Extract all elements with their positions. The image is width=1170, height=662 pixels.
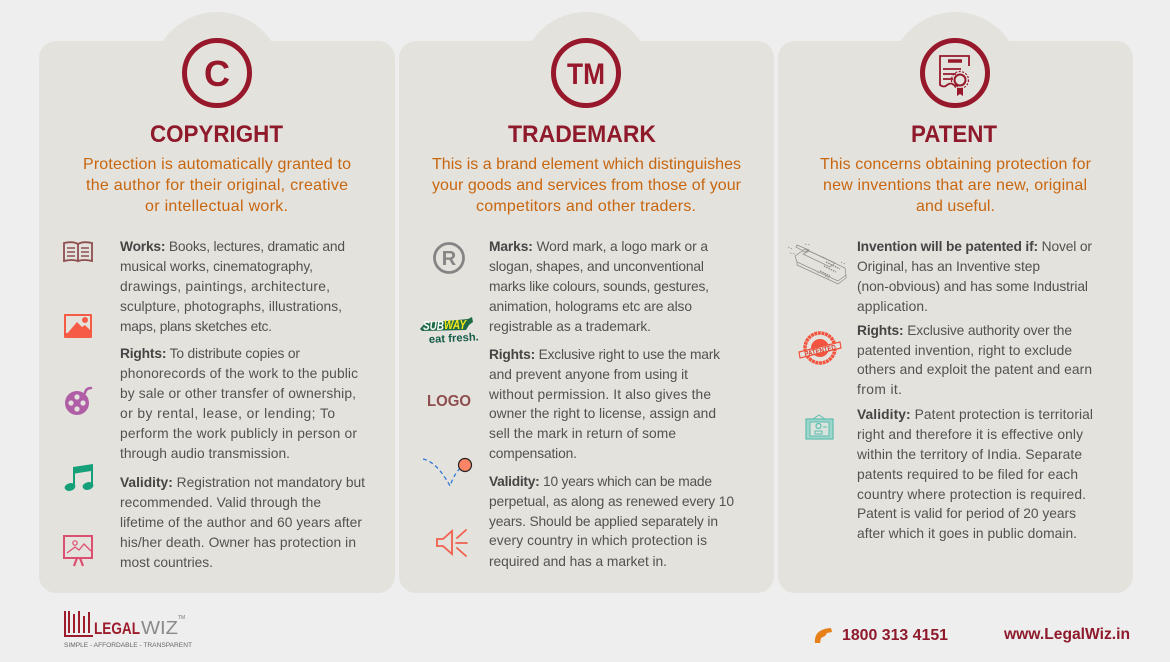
icon: logo word: LOGO <box>427 393 471 410</box>
footer logo: LegalWiz: TM <box>178 615 185 621</box>
text: copyright details: or by rental, lease, or lending; To <box>120 406 335 421</box>
icon: patented stamp <box>799 333 841 363</box>
intro: trademark <box>432 156 742 215</box>
text: patent details: (non-obvious) and has some Industrial <box>857 279 1088 294</box>
text: copyright details: Validity: Registration not mandatory but <box>120 475 365 490</box>
footer logo: LegalWiz: SIMPLE - AFFORDABLE - TRANSPARENT <box>64 642 192 649</box>
text: trademark details: slogan, shapes, and unconventional <box>489 259 704 274</box>
icon: patented stamp: PATENTED <box>804 342 837 358</box>
icon: presentation board <box>63 536 93 566</box>
icon: bouncing ball <box>423 458 472 486</box>
icon: copyright symbol <box>184 40 250 106</box>
text: copyright details: musical works, cinematography, <box>120 259 313 274</box>
icon: registered mark <box>434 244 464 272</box>
text: patent details: patented invention, right to exclude <box>857 343 1072 358</box>
text: copyright details: his/her death. Owner has protection in <box>120 535 356 550</box>
footer logo: LegalWiz: LEGAL <box>94 619 140 638</box>
text: copyright details: most countries. <box>120 555 213 570</box>
panel: patent <box>778 12 1133 593</box>
intro: trademark: your goods and services from those of your <box>432 177 742 194</box>
icon: music note <box>64 464 94 492</box>
footer logo: LegalWiz: WIZ <box>141 618 178 638</box>
text: trademark details: years. Should be applied separately in <box>489 514 718 529</box>
text: trademark details: registrable as a trademark. <box>489 319 651 334</box>
text: trademark details: perpetual, as along as renewed every 10 <box>489 494 734 509</box>
text: copyright details: Rights: To distribute copies or <box>120 346 300 361</box>
text: copyright details: maps, plans sketches etc. <box>120 319 272 334</box>
text: patent details: others and exploit the patent and earn <box>857 362 1092 377</box>
text: patent details: application. <box>857 299 928 314</box>
text: trademark details <box>488 239 734 569</box>
text: copyright details: drawings, paintings, architecture, <box>120 279 330 294</box>
text: copyright details: sculpture, photographs, illustrations, <box>120 299 342 314</box>
text: trademark details: animation, holograms etc are also <box>489 299 692 314</box>
text: patent details: Rights: Exclusive authority over the <box>857 323 1072 338</box>
icon: teal certificate <box>806 415 833 439</box>
intro: patent: This concerns obtaining protection for <box>820 156 1092 173</box>
icon: subway logo: eat fresh. <box>429 331 479 346</box>
icon: TM symbol <box>554 40 618 106</box>
icon: device patent drawing <box>788 244 846 284</box>
intro: patent <box>820 156 1092 215</box>
intro: patent: and useful. <box>916 198 995 215</box>
text: trademark details: required and has a market in. <box>489 554 667 569</box>
text: copyright details: lifetime of the author and 60 years after <box>120 515 362 530</box>
text: patent details: country where protection is required. <box>857 487 1086 502</box>
text: patent details: Original, has an Inventive step <box>857 259 1040 274</box>
footer website: www.LegalWiz.in <box>1003 626 1130 643</box>
intro: trademark: This is a brand element which distinguishes <box>432 156 741 173</box>
text: trademark details: and prevent anyone from using it <box>489 367 688 382</box>
text: copyright details: Works: Books, lectures, dramatic and <box>120 239 345 254</box>
text: trademark details: owner the right to license, assign and <box>489 406 716 421</box>
icon: subway logo: SUB <box>423 319 444 333</box>
text: patent details: after which it goes in public domain. <box>857 526 1077 541</box>
heading: patent: PATENT <box>911 121 997 148</box>
heading: copyright: COPYRIGHT <box>150 121 283 148</box>
icon: subway logo: WAY <box>444 318 467 332</box>
text: patent details: Patent is valid for period of 20 years <box>857 506 1076 521</box>
text: patent details: from it. <box>857 382 902 397</box>
text: copyright details: phonorecords of the work to the public <box>120 366 358 381</box>
heading: trademark: TRADEMARK <box>508 121 657 148</box>
intro: copyright: Protection is automatically granted to <box>83 156 351 173</box>
icon: TM symbol: TM <box>567 58 605 91</box>
icon: registered mark: R <box>442 248 457 270</box>
text: trademark details: marks like colours, sounds, gestures, <box>489 279 709 294</box>
text: copyright details: perform the work publicly in person or <box>120 426 357 441</box>
text: trademark details: Rights: Exclusive right to use the mark <box>489 347 720 362</box>
text: patent details: Validity: Patent protection is territorial <box>857 407 1093 422</box>
text: trademark details: Validity: 10 years which can be made <box>489 474 712 489</box>
intro: patent: new inventions that are new, original <box>823 177 1087 194</box>
text: trademark details: Marks: Word mark, a logo mark or a <box>489 239 708 254</box>
icon: subway logo <box>420 317 479 346</box>
icon: phone <box>815 628 832 643</box>
text: trademark details: sell the mark in return of some <box>489 426 676 441</box>
text: copyright details: recommended. Valid through the <box>120 495 321 510</box>
text: patent details <box>856 239 1093 541</box>
panel: copyright <box>39 12 395 593</box>
text: copyright details <box>120 239 365 570</box>
text: patent details: within the territory of India. Separate <box>856 447 1082 462</box>
intro: trademark: competitors and other traders. <box>476 198 696 215</box>
intro: copyright <box>83 156 351 215</box>
panel: trademark <box>399 12 774 593</box>
icon: book <box>64 242 92 261</box>
text: copyright details: by sale or other transfer of ownership, <box>120 386 356 401</box>
footer logo: LegalWiz <box>64 611 192 649</box>
footer phone number: 1800 313 4151 <box>842 627 948 644</box>
icon: picture <box>64 314 92 338</box>
text: trademark details: without permission. It also gives the <box>488 387 711 402</box>
intro: copyright: the author for their original, creative <box>86 177 348 194</box>
icon: megaphone <box>437 530 467 556</box>
text: patent details: Invention will be patented if: Novel or <box>857 239 1092 254</box>
text: copyright details: through audio transmission. <box>120 446 290 461</box>
text: patent details: patents required to be filed for each <box>857 467 1078 482</box>
icon: film reel <box>65 388 91 415</box>
text: trademark details: compensation. <box>489 446 577 461</box>
icon: copyright symbol: C <box>204 53 230 94</box>
icon: patent certificate <box>922 40 988 106</box>
text: patent details: right and therefore it is effective only <box>857 427 1083 442</box>
text: trademark details: every country in which protection is <box>489 533 707 548</box>
intro: copyright: or intellectual work. <box>145 198 288 215</box>
